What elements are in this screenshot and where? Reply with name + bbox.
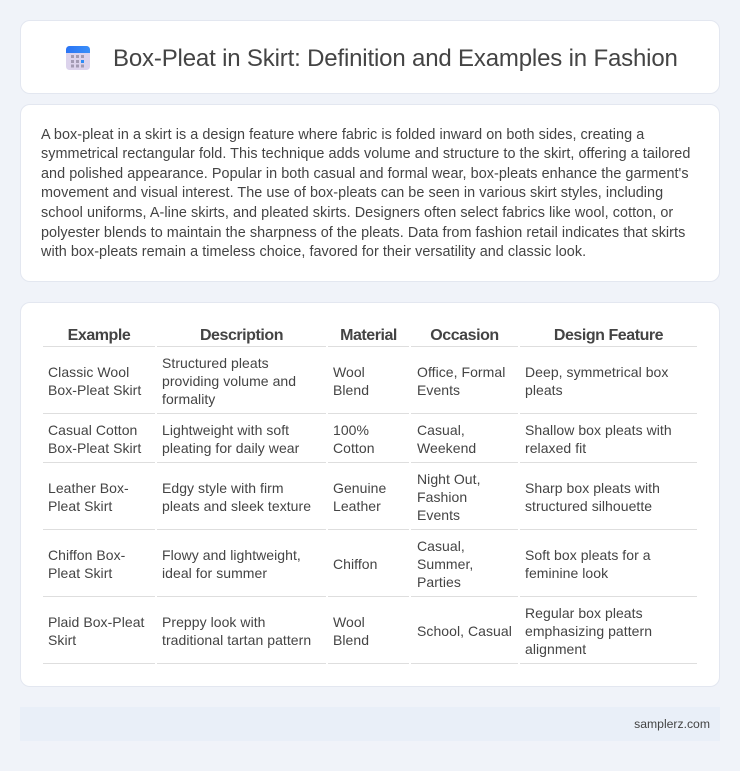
row: casual cotton: Weekend [417, 440, 476, 456]
row: plaid: Plaid Box-Pleat [48, 614, 144, 630]
row: classic wool [48, 355, 668, 407]
intro paragraph [41, 126, 690, 260]
intro paragraph: with box-pleats remain a timeless choice, favored for their versatility and classic look. [41, 244, 586, 260]
row: casual cotton: Box-Pleat Skirt [48, 440, 141, 456]
row: plaid: alignment [525, 641, 586, 657]
row: plaid [48, 605, 652, 657]
row: classic wool: Structured pleats [162, 355, 269, 371]
table header: Description [200, 327, 283, 344]
table header [68, 327, 663, 344]
table header: Example [68, 327, 130, 344]
table grid rules [43, 346, 697, 664]
row: plaid: Preppy look with [162, 614, 266, 630]
row: plaid: Skirt [48, 632, 76, 648]
row: leather: Leather Box- [48, 480, 129, 496]
intro paragraph: movement and visual interest. The use of box-pleats can be seen in various skirt styles, including [41, 185, 663, 201]
intro paragraph: school uniforms, A-line skirts, and pleated skirts. Designers often select fabrics like wool, cotton, or [41, 205, 673, 221]
table header: Occasion [430, 327, 499, 344]
row: classic wool: Office, Formal [417, 364, 505, 380]
row: leather: Edgy style with firm [162, 480, 284, 496]
row: casual cotton: Lightweight with soft [162, 422, 289, 438]
row: leather: Night Out, [417, 471, 481, 487]
row: casual cotton: Shallow box pleats with [525, 422, 672, 438]
row: plaid: School, Casual [417, 623, 512, 639]
row: leather: structured silhouette [525, 498, 652, 514]
row: leather: Genuine [333, 480, 386, 496]
row: plaid: Regular box pleats [525, 605, 643, 621]
footer [20, 707, 720, 741]
row: casual cotton: relaxed fit [525, 440, 586, 456]
row: classic wool: providing volume and [162, 373, 296, 389]
row: leather: Leather [333, 498, 381, 514]
panel: table [20, 302, 720, 687]
row: plaid: traditional tartan pattern [162, 632, 311, 648]
row: chiffon: Chiffon [333, 556, 377, 572]
panel: header [20, 20, 720, 94]
row: plaid: Blend [333, 632, 369, 648]
row: chiffon: Flowy and lightweight, [162, 547, 301, 563]
row: plaid: emphasizing pattern [525, 623, 652, 639]
row: leather: Pleat Skirt [48, 498, 112, 514]
row: casual cotton: pleating for daily wear [162, 440, 299, 456]
row: chiffon: feminine look [525, 565, 608, 581]
row: leather: Fashion [417, 489, 467, 505]
row: chiffon: Pleat Skirt [48, 565, 112, 581]
row: chiffon: Summer, [417, 556, 473, 572]
panel: intro text [20, 104, 720, 282]
table header: Design Feature [554, 327, 663, 344]
row: chiffon: Parties [417, 574, 461, 590]
row: leather: Sharp box pleats with [525, 480, 660, 496]
row: leather: Events [417, 507, 460, 523]
row: plaid: Wool [333, 614, 365, 630]
row: classic wool: Blend [333, 382, 369, 398]
intro paragraph: symmetrical rectangular fold. This technique adds volume and structure to the skirt, offering a tailored [41, 146, 690, 162]
intro paragraph: A box-pleat in a skirt is a design feature where fabric is folded inward on both sides, creating a [41, 126, 644, 142]
row: classic wool: pleats [525, 382, 563, 398]
row: classic wool: Classic Wool [48, 364, 129, 380]
row: leather: pleats and sleek texture [162, 498, 311, 514]
row: chiffon: ideal for summer [162, 565, 267, 581]
row: casual cotton: Casual Cotton [48, 422, 137, 438]
row: classic wool: formality [162, 391, 215, 407]
row: casual cotton: Cotton [333, 440, 375, 456]
row: classic wool: Box-Pleat Skirt [48, 382, 141, 398]
table header: Material [340, 327, 397, 344]
row: classic wool: Wool [333, 364, 365, 380]
row: chiffon: Chiffon Box- [48, 547, 125, 563]
row: casual cotton [48, 422, 672, 456]
intro paragraph: polyester blends to maintain the sharpness of the pleats. Data from fashion retail indicates that skirts [41, 224, 685, 240]
row: chiffon: Casual, [417, 538, 465, 554]
row: leather [48, 471, 660, 523]
icon: calendar [66, 46, 90, 70]
row: casual cotton: Casual, [417, 422, 465, 438]
row: casual cotton: 100% [333, 422, 369, 438]
title: Box-Pleat in Skirt: Definition and Examples in Fashion [113, 45, 678, 72]
row: chiffon [48, 538, 651, 590]
row: chiffon: Soft box pleats for a [525, 547, 651, 563]
intro paragraph: and polished appearance. Popular in both casual and formal wear, box-pleats enhance the garment's [41, 166, 689, 182]
row: classic wool: Deep, symmetrical box [525, 364, 668, 380]
footer credit: samplerz.com [634, 717, 710, 731]
row: classic wool: Events [417, 382, 460, 398]
